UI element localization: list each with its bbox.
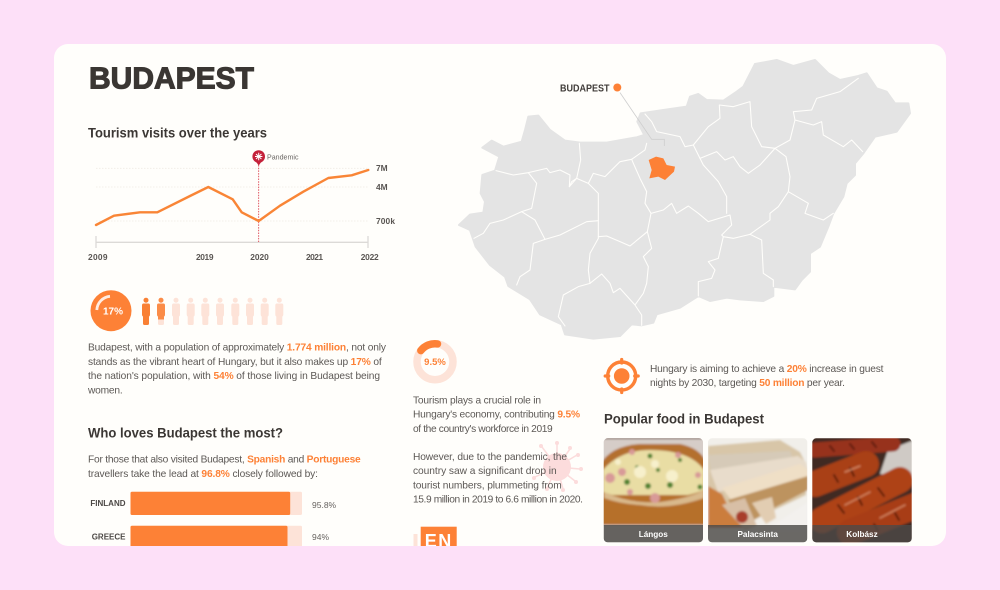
map of Hungary: [459, 60, 910, 339]
year labels: 2022: [361, 252, 379, 262]
bar: Finland: FINLAND: [90, 499, 126, 508]
bar: Finland: [90, 492, 337, 515]
heading: tourism visits: Tourism visits over the years: [88, 126, 267, 140]
text: 2030 target: Hungary is aiming to achieve a 20% increase in guest: [650, 364, 884, 375]
donut: 9.5 percent: 9.5%: [424, 357, 446, 368]
text: travellers intro: [88, 455, 361, 480]
map label: Budapest: [560, 84, 622, 92]
donut: 9.5 percent: [417, 344, 453, 380]
year labels: 2020: [250, 252, 269, 262]
value labels: 7M: [376, 163, 388, 173]
bar: Greece: [92, 526, 329, 546]
people pictogram: [142, 298, 283, 325]
text: 2030 target: nights by 2030, targeting 50 million per year.: [650, 378, 845, 389]
text: pandemic drop: tourist numbers, plummeting from: [413, 480, 562, 491]
text: travellers intro: travellers take the lead at 96.8% closely followed by:: [88, 469, 318, 480]
text: 2030 target: [650, 364, 884, 389]
text: population: the nation's population, with 54% of those living in Budapest being: [88, 371, 380, 382]
text: population: women.: [87, 386, 123, 396]
value labels: 700k: [376, 216, 395, 226]
text: pandemic drop: 15.9 million in 2019 to 6.6 million in 2020.: [413, 495, 583, 506]
text: pandemic drop: [413, 452, 583, 506]
text: tourism economy: Tourism plays a crucial role in: [413, 395, 541, 406]
donut: 17 percent: [90, 290, 132, 331]
text: travellers intro: For those that also visited Budapest, Spanish and Portuguese: [88, 455, 361, 466]
text: tourism economy: Hungary's economy, contributing 9.5%: [413, 410, 580, 421]
label: Kolbász: [846, 530, 878, 539]
pandemic marker: Pandemic: [267, 152, 299, 162]
icon: EN sign: [414, 526, 457, 546]
leader line: [620, 93, 664, 146]
text: population: [87, 342, 387, 396]
Budapest highlight: [649, 157, 675, 180]
label: Palacsinta: [737, 530, 778, 539]
text: pandemic drop: However, due to the pandemic, the: [413, 452, 567, 463]
year labels: 2021: [306, 252, 323, 262]
icon: EN sign: EN: [425, 531, 453, 551]
value labels: 4M: [376, 182, 388, 192]
label: Lángos: [639, 530, 668, 539]
pandemic marker: [252, 150, 299, 166]
line chart: tourism visits: [88, 150, 395, 262]
year labels: 2009: [88, 252, 108, 262]
photo: Langos: [604, 438, 703, 542]
text: tourism economy: of the country's workforce in 2019: [413, 424, 553, 435]
photo: Palacsinta: [708, 438, 808, 542]
bar: Finland: 95.8%: [312, 500, 337, 510]
card background: [54, 44, 946, 546]
country shape: [459, 60, 910, 339]
bar: Greece: GREECE: [92, 532, 126, 542]
county borders: [474, 78, 863, 326]
icon: target: [605, 360, 638, 392]
photo: Kolbasz: [812, 438, 912, 542]
text: tourism economy: [413, 395, 580, 435]
donut: 17 percent: 17%: [103, 306, 123, 317]
text: pandemic drop: country saw a significant drop in: [413, 466, 557, 477]
bar: Greece: 94%: [312, 532, 329, 542]
year labels: [88, 254, 378, 260]
heading: popular food: Popular food in Budapest: [604, 411, 764, 426]
year labels: 2019: [196, 252, 214, 262]
icon: virus: [532, 441, 583, 492]
value labels: [376, 163, 395, 226]
text: population: stands as the vibrant heart of Hungary, but it also makes up 17% of: [88, 357, 382, 368]
bar chart: nationalities: [90, 492, 336, 546]
text: population: Budapest, with a population of approximately 1.774 million, not only: [88, 342, 387, 354]
map label: Budapest: BUDAPEST: [560, 84, 610, 94]
card contents: [87, 60, 925, 556]
heading: who loves Budapest: Who loves Budapest the most?: [88, 426, 283, 441]
title: BUDAPEST: [89, 61, 254, 95]
